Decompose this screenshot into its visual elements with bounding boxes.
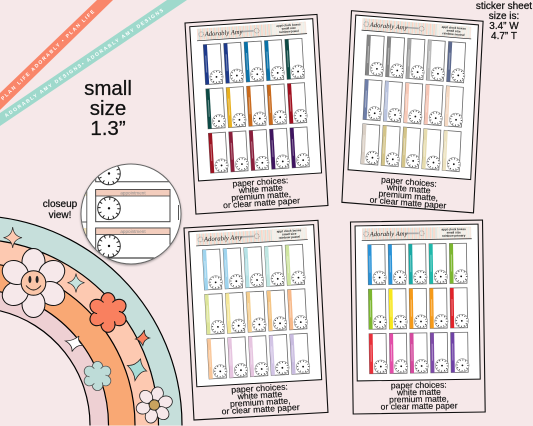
- icon: white star: [66, 336, 83, 352]
- icon: teal flower: [82, 361, 113, 391]
- closeup stickers: appointment: [120, 229, 146, 234]
- panel: sticker sheet jewel: [185, 14, 328, 214]
- caption: paper choices: or clear matte paper: [369, 195, 447, 211]
- caption: paper choices: [380, 379, 458, 412]
- icon: peach sparkle: [4, 227, 22, 248]
- icon: smiley flower: [0, 248, 69, 318]
- sheet header: [196, 227, 308, 246]
- closeup stickers: [81, 160, 178, 262]
- sticker grid: [202, 244, 310, 379]
- caption: paper choices: or clear matte paper: [221, 402, 300, 416]
- label: sticker sheet size: 3.4” W: [489, 21, 519, 32]
- sheet header: rainbow neutral: [442, 31, 465, 37]
- sheet header: small size: [446, 28, 461, 34]
- closeup stickers: appointment: [120, 190, 146, 196]
- caption: paper choices: premium matte,: [389, 394, 449, 404]
- ribbon: plan life adorably: PLAN LIFE ADORABLY • PLAN LIFE: [0, 8, 97, 102]
- caption: paper choices: paper choices:: [231, 382, 288, 395]
- sticker grid: [368, 243, 469, 374]
- caption: paper choices: [222, 174, 300, 210]
- caption: paper choices: paper choices:: [391, 380, 447, 390]
- caption: paper choices: white matte: [238, 182, 283, 195]
- caption: paper choices: or clear matte paper: [223, 195, 300, 210]
- icon: teal sparkle: [68, 274, 84, 292]
- caption: paper choices: [220, 381, 300, 416]
- icon: orange flower: [87, 293, 129, 332]
- label: closeup view: view!: [49, 210, 71, 221]
- caption: paper choices: white matte: [386, 182, 431, 195]
- caption: paper choices: premium matte,: [231, 189, 291, 203]
- sticker grid: [203, 38, 310, 173]
- sheet header: rainbow pastel: [279, 235, 300, 240]
- sheet header: [362, 227, 472, 240]
- icon: daisy: [135, 386, 174, 424]
- label: sticker sheet size: 4.7” T: [491, 31, 517, 42]
- heading: small size 1.3: size: [90, 97, 126, 120]
- sheet header: rainbow primary: [442, 233, 466, 238]
- caption: paper choices: paper choices:: [232, 175, 289, 189]
- icon: teal star: [128, 359, 146, 380]
- caption: paper choices: paper choices:: [381, 174, 437, 189]
- sheet header: rainbow jewel: [279, 29, 299, 34]
- caption: paper choices: white matte: [236, 389, 283, 401]
- panel: sticker sheet neutral: [342, 11, 483, 213]
- label: sticker sheet size: size is:: [489, 11, 519, 22]
- sheet header: appt clock boxes: [441, 227, 466, 231]
- caption: paper choices: premium matte,: [230, 396, 291, 409]
- panel: sticker sheet primary: [350, 220, 485, 414]
- caption: paper choices: or clear matte paper: [381, 400, 458, 412]
- heading: small size 1.3: 1.3”: [90, 117, 126, 140]
- label: sticker sheet size: sticker sheet: [476, 1, 532, 12]
- sheet header: small size: [282, 232, 297, 236]
- sheet header: small size: [282, 26, 296, 31]
- sheet header: appt clock boxes: [276, 22, 301, 28]
- caption: paper choices: [369, 174, 448, 211]
- sheet header: [362, 18, 472, 39]
- panel: sticker sheet pastel: [184, 220, 328, 420]
- label: sticker sheet size: [476, 1, 532, 42]
- sheet header: appt clock boxes: [277, 228, 302, 234]
- ribbon: adorably amy designs: ADORABLY AMY DESIGNS• ADORABLY AMY DESIGNS: [4, 7, 166, 119]
- sheet header: appt clock boxes: [442, 25, 466, 31]
- label: closeup view: [43, 199, 78, 221]
- caption: paper choices: white matte: [396, 387, 441, 397]
- sheet header: [196, 22, 307, 41]
- icon: orange diamond star: [136, 330, 150, 346]
- heading: small size 1.3: [84, 77, 132, 140]
- label: closeup view: closeup: [43, 199, 78, 210]
- caption: paper choices: premium matte,: [378, 188, 438, 203]
- closeup magnifier: [81, 160, 181, 264]
- rainbow: [0, 217, 182, 426]
- heading: small size 1.3: small: [84, 77, 132, 100]
- sticker grid: [361, 35, 467, 172]
- sheet header: small size: [447, 230, 461, 235]
